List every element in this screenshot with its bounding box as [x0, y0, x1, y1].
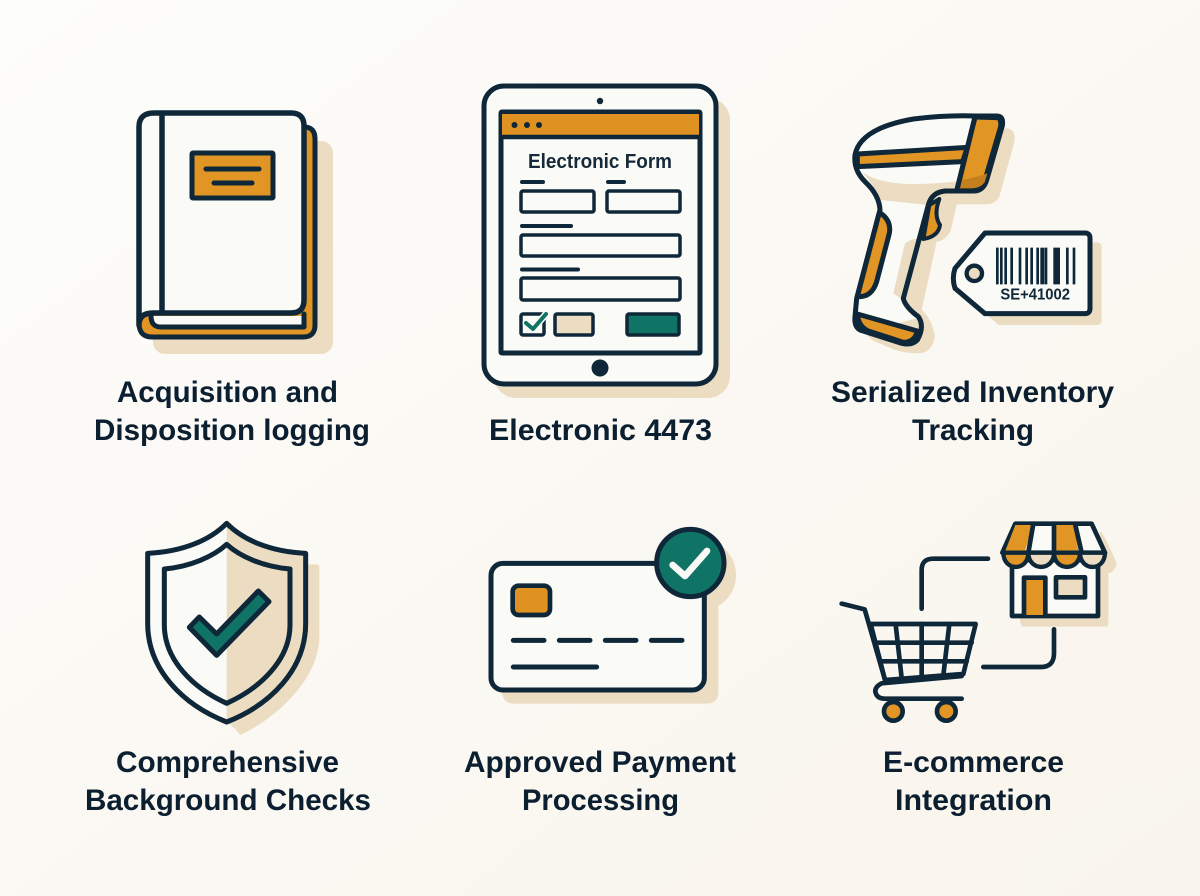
panel: electronic 4473 — [484, 86, 730, 447]
storefront — [1012, 560, 1098, 616]
label: comprehensive background checks: Background Checks — [85, 784, 371, 817]
label: electronic 4473: Electronic 4473 — [489, 414, 712, 447]
panel: e-commerce integration — [842, 524, 1117, 817]
icon: shield with checkmark — [148, 523, 319, 735]
label: serialized inventory tracking: Tracking — [912, 414, 1034, 447]
label: comprehensive background checks — [85, 746, 371, 817]
label: comprehensive background checks: Comprehensive — [116, 746, 339, 779]
scanner body fill — [855, 116, 1003, 344]
barcode tag — [953, 233, 1090, 314]
label: e-commerce integration: E-commerce — [883, 746, 1064, 779]
panel: serialized inventory tracking — [831, 116, 1114, 447]
label: approved payment processing: Processing — [522, 784, 679, 817]
label: serialized inventory tracking — [831, 376, 1114, 447]
form title: Electronic Form — [528, 150, 672, 173]
label: serialized inventory tracking: Serialized Inventory — [831, 376, 1114, 409]
scanner outline — [855, 116, 1003, 344]
panel: approved payment processing — [464, 529, 736, 817]
label: acquisition and disposition logging: Disposition logging — [94, 414, 370, 447]
label: approved payment processing — [464, 746, 736, 817]
label: e-commerce integration: Integration — [895, 784, 1052, 817]
shopping cart — [842, 604, 885, 680]
connector arrows — [922, 559, 988, 609]
label: acquisition and disposition logging: Acquisition and — [117, 376, 338, 409]
label: approved payment processing: Approved Payment — [464, 746, 736, 779]
icon: barcode scanner and tag — [855, 116, 1102, 353]
tag shadow — [965, 242, 1102, 325]
panel: acquisition and disposition logging — [94, 113, 370, 447]
icon: credit card with approval badge — [491, 529, 736, 704]
icon: ledger book — [139, 113, 333, 354]
scanner shadow — [862, 128, 1015, 353]
label: acquisition and disposition logging — [94, 376, 370, 447]
icon: tablet with electronic form — [484, 86, 730, 398]
label: e-commerce integration — [883, 746, 1064, 817]
tag serial number: SE+41002 — [1000, 287, 1070, 304]
icon: shopping cart linked to storefront — [842, 524, 1117, 721]
panel: comprehensive background checks — [85, 523, 371, 817]
